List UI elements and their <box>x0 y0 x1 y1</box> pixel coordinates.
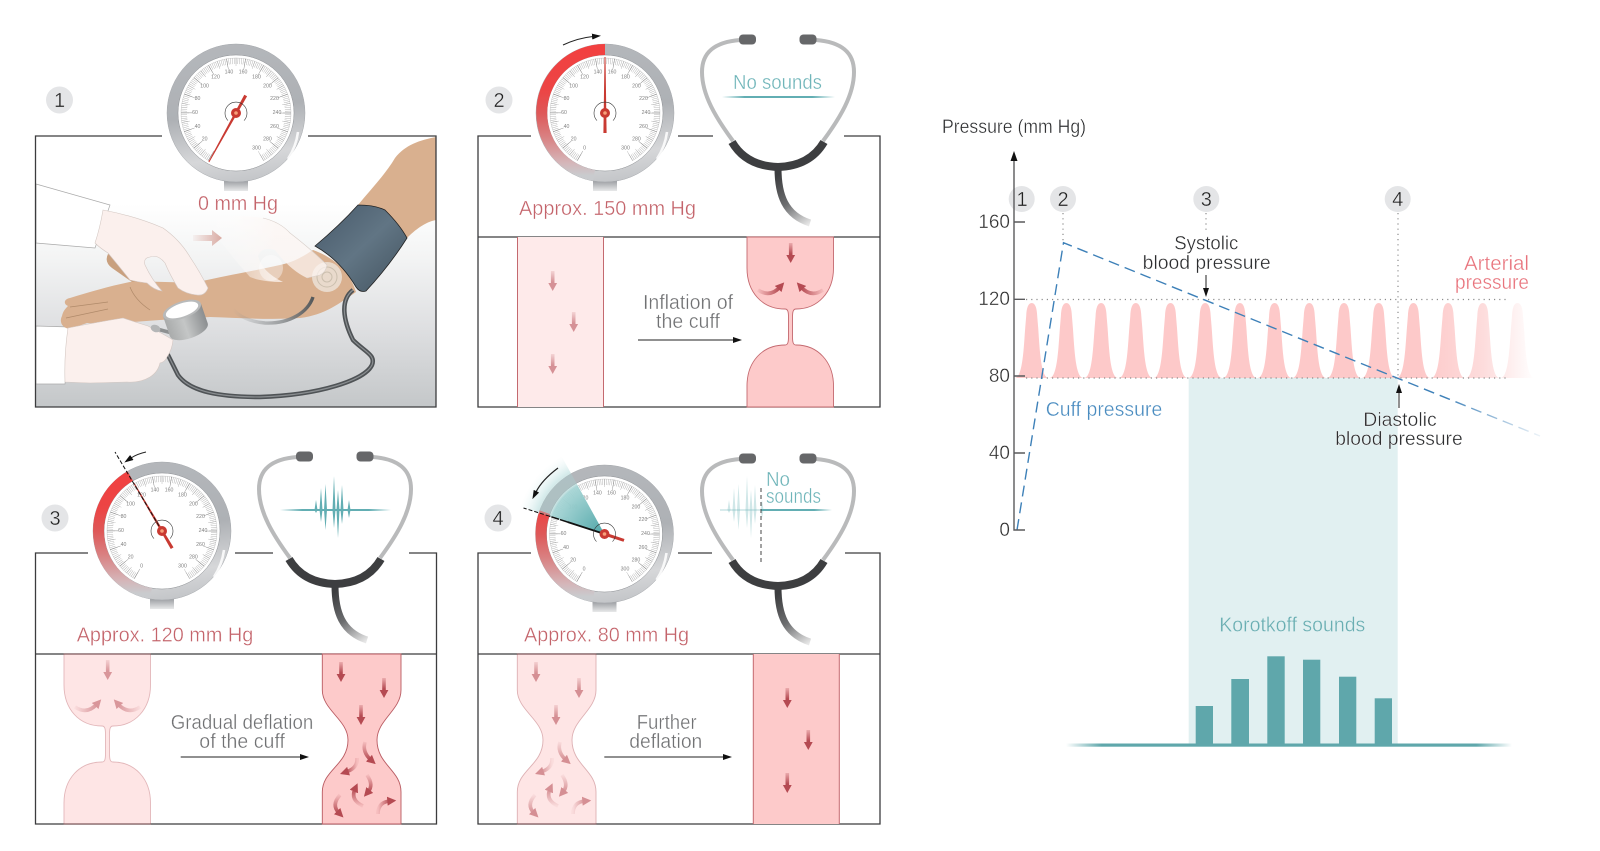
flow arrows in open artery <box>783 688 813 793</box>
panel 3: gradual deflation <box>36 452 436 824</box>
step number 4 <box>484 504 512 532</box>
step number 4: 4 <box>492 508 504 530</box>
panel border <box>478 553 880 824</box>
blood pressure cuff <box>315 205 407 292</box>
gauge: 0 mm Hg <box>167 44 305 191</box>
step badge 3: 3 <box>1201 189 1212 211</box>
dial numbers: 220 <box>196 514 205 520</box>
dial numbers: 260 <box>639 124 648 130</box>
background gradient <box>36 136 436 407</box>
arterial pressure label: Arterial <box>1464 253 1529 275</box>
falling arrow <box>536 468 558 492</box>
needle <box>207 95 247 163</box>
step number 3 <box>42 504 68 532</box>
Korotkoff label: Korotkoff sounds <box>1219 615 1365 637</box>
flow arrows in open artery <box>548 271 578 374</box>
doctor's upper gloved hand <box>95 210 208 295</box>
transition label: deflation <box>629 731 702 753</box>
Korotkoff bars <box>1196 656 1392 746</box>
dial numbers: 100 <box>569 84 578 90</box>
dial numbers: 220 <box>270 96 279 102</box>
dial numbers: 180 <box>621 74 630 80</box>
cuff pressure label: Cuff pressure <box>1046 399 1162 421</box>
dial numbers: 140 <box>594 70 602 76</box>
y axis labels: 160 <box>978 212 1010 233</box>
dial numbers: 40 <box>195 124 200 130</box>
step badge 1 <box>1009 186 1035 212</box>
stethoscope <box>702 454 854 642</box>
occluded artery <box>747 237 834 407</box>
no sounds label: sounds <box>766 486 821 508</box>
step number 3: 3 <box>49 508 61 530</box>
stethoscope tube, moving <box>233 297 313 323</box>
dial numbers: 120 <box>137 492 146 498</box>
dial numbers: 280 <box>632 557 640 563</box>
dial numbers: 80 <box>564 96 569 102</box>
pressure reading: Approx. 80 mm Hg <box>524 625 689 647</box>
step number 2 <box>486 86 512 114</box>
dial numbers: 60 <box>561 110 567 116</box>
patient's forearm and hand <box>61 250 356 329</box>
transition label <box>643 292 733 333</box>
time baseline <box>1066 744 1512 747</box>
ghost hand and chest piece <box>205 216 342 292</box>
dial numbers <box>118 488 207 570</box>
rising arrow <box>563 36 593 45</box>
y axis title: Pressure (mm Hg) <box>942 117 1086 138</box>
diastolic arrow <box>1398 392 1400 408</box>
dial numbers: 60 <box>561 531 566 537</box>
dial numbers: 20 <box>202 136 208 142</box>
dial numbers: 160 <box>165 488 174 494</box>
pressure reading: 0 mm Hg <box>198 193 278 215</box>
y axis labels: 40 <box>989 443 1010 464</box>
dial numbers: 120 <box>580 74 589 80</box>
arterial pressure label: pressure <box>1455 272 1529 294</box>
transition label <box>629 712 702 753</box>
panel 4: further deflation <box>478 454 880 824</box>
dial numbers: 180 <box>178 492 187 498</box>
diastolic label: blood pressure <box>1335 429 1463 450</box>
dial numbers: 20 <box>570 557 576 563</box>
dial numbers: 60 <box>118 528 124 534</box>
dial numbers: 40 <box>121 542 126 548</box>
step badge 4 <box>1385 186 1411 212</box>
cuff tube <box>167 290 373 397</box>
pressure reading: Approx. 150 mm Hg <box>519 198 696 220</box>
step badge 3 <box>1193 186 1219 212</box>
panel border <box>36 553 436 824</box>
dial numbers: 200 <box>632 84 641 90</box>
dial numbers: 240 <box>273 110 281 116</box>
Korotkoff band <box>1189 378 1398 746</box>
pressure chart <box>942 117 1540 747</box>
patient's upper arm <box>358 137 436 238</box>
partly open artery, pale <box>517 654 596 824</box>
panel 2: inflation <box>478 34 880 407</box>
sphygmomanometer valve and gauge body <box>150 295 211 344</box>
dial numbers: 200 <box>189 502 198 508</box>
stethoscope <box>702 34 854 223</box>
dial numbers: 160 <box>607 491 616 497</box>
dial numbers: 240 <box>199 528 207 534</box>
open artery <box>518 237 604 407</box>
panel border <box>36 136 436 407</box>
dial numbers: 300 <box>178 564 187 570</box>
y axis labels <box>978 212 1010 541</box>
turbulent flow arrows <box>335 662 390 814</box>
transition label: Gradual deflation <box>171 712 313 734</box>
dial numbers: 220 <box>639 96 648 102</box>
transition label: Inflation of <box>643 292 733 314</box>
transition arrow <box>181 756 301 758</box>
dial numbers: 100 <box>126 502 135 508</box>
dial numbers: 260 <box>270 124 279 130</box>
systolic label: Systolic <box>1174 233 1238 254</box>
dial numbers: 0 <box>583 566 586 572</box>
dial numbers: 200 <box>632 505 640 511</box>
arterial pressure label <box>1455 253 1529 294</box>
dial numbers: 240 <box>642 110 650 116</box>
transition label <box>171 712 313 753</box>
dial numbers: 280 <box>632 136 641 142</box>
needle <box>603 57 607 133</box>
dial numbers: 80 <box>563 517 569 523</box>
dial numbers <box>561 491 650 572</box>
dial numbers: 240 <box>641 531 650 537</box>
dial numbers: 60 <box>192 110 198 116</box>
dial numbers <box>192 70 281 152</box>
dial numbers: 20 <box>128 554 134 560</box>
turbulent flow arrows, pale <box>530 662 585 814</box>
dial numbers: 120 <box>211 74 220 80</box>
fully open artery <box>753 654 839 824</box>
dial numbers: 180 <box>621 496 629 502</box>
dial numbers: 0 <box>140 564 143 570</box>
blocked flow arrows <box>758 243 823 293</box>
dial numbers: 180 <box>252 74 261 80</box>
no sounds label <box>766 469 821 508</box>
step number 2: 2 <box>493 90 505 112</box>
transition arrow <box>604 756 724 758</box>
auscultatory marker line <box>524 508 604 534</box>
panel 1: cuff placement <box>36 44 436 407</box>
dial numbers: 160 <box>608 70 617 76</box>
dial numbers: 300 <box>621 146 630 152</box>
systolic label <box>1143 233 1271 274</box>
dial numbers: 200 <box>263 84 272 90</box>
needle <box>132 482 174 549</box>
falling arrow <box>131 452 146 458</box>
end of sound marker <box>760 488 762 562</box>
dial numbers: 300 <box>621 566 629 572</box>
cuff pressure line <box>1017 243 1540 530</box>
needle tail <box>604 532 624 542</box>
auscultation wedge <box>520 456 604 534</box>
dial numbers: 0 <box>583 146 586 152</box>
dial numbers: 220 <box>639 517 647 523</box>
y axis labels: 120 <box>978 289 1010 310</box>
no sounds label: No <box>766 469 790 491</box>
step number 1 <box>46 86 73 114</box>
dial numbers: 20 <box>571 136 577 142</box>
arterial pressure pulses <box>1015 303 1534 378</box>
y axis labels: 80 <box>989 366 1010 387</box>
dial numbers: 280 <box>189 554 198 560</box>
flat sound line <box>761 509 832 511</box>
transition label: of the cuff <box>199 731 285 753</box>
sound waveform <box>280 476 391 538</box>
dial numbers: 280 <box>263 136 272 142</box>
motion arrow <box>193 230 222 246</box>
dial numbers: 140 <box>151 488 159 494</box>
doctor's sleeves <box>36 184 110 384</box>
step badge 2: 2 <box>1057 189 1069 211</box>
gauge: 120 mm Hg <box>93 452 231 609</box>
dial numbers: 80 <box>195 96 200 102</box>
gauge: 150 mm Hg <box>536 44 674 191</box>
diastolic label: Diastolic <box>1363 410 1437 431</box>
blocked flow arrows, pale <box>75 660 140 710</box>
systolic arrow <box>1205 275 1207 289</box>
flat sound line <box>722 96 835 98</box>
dial numbers: 100 <box>200 84 209 90</box>
dial numbers: 80 <box>121 514 126 520</box>
gauge: 80 mm Hg <box>520 456 674 612</box>
dial numbers <box>561 70 650 152</box>
y axis <box>1010 151 1025 530</box>
step badge 1: 1 <box>1016 189 1028 211</box>
panel border <box>478 136 880 407</box>
dial numbers: 160 <box>239 70 248 76</box>
occluded artery, pale <box>64 654 150 824</box>
diastolic label <box>1335 410 1463 450</box>
transition label: Further <box>637 712 697 734</box>
dial numbers: 120 <box>580 496 588 502</box>
transition arrow <box>638 339 734 341</box>
dial numbers: 140 <box>593 491 602 497</box>
pressure reading: Approx. 120 mm Hg <box>77 625 253 647</box>
step number 1: 1 <box>54 90 65 112</box>
partly open artery <box>322 654 401 824</box>
dial numbers: 140 <box>225 70 233 76</box>
dial numbers: 260 <box>639 545 647 551</box>
step badge 4: 4 <box>1392 189 1403 211</box>
y axis labels: 0 <box>999 520 1010 541</box>
fading waveform <box>720 476 764 538</box>
dial numbers: 100 <box>569 505 578 511</box>
transition label: the cuff <box>656 311 720 333</box>
dial numbers: 260 <box>196 542 205 548</box>
step badge 2 <box>1050 186 1076 212</box>
dial numbers: 300 <box>252 146 261 152</box>
no sounds label: No sounds <box>733 72 822 94</box>
dial numbers: 40 <box>563 545 569 551</box>
doctor's lower gloved hand <box>65 318 173 383</box>
dial numbers: 40 <box>564 124 569 130</box>
stethoscope <box>259 452 411 640</box>
systolic label: blood pressure <box>1143 253 1271 274</box>
